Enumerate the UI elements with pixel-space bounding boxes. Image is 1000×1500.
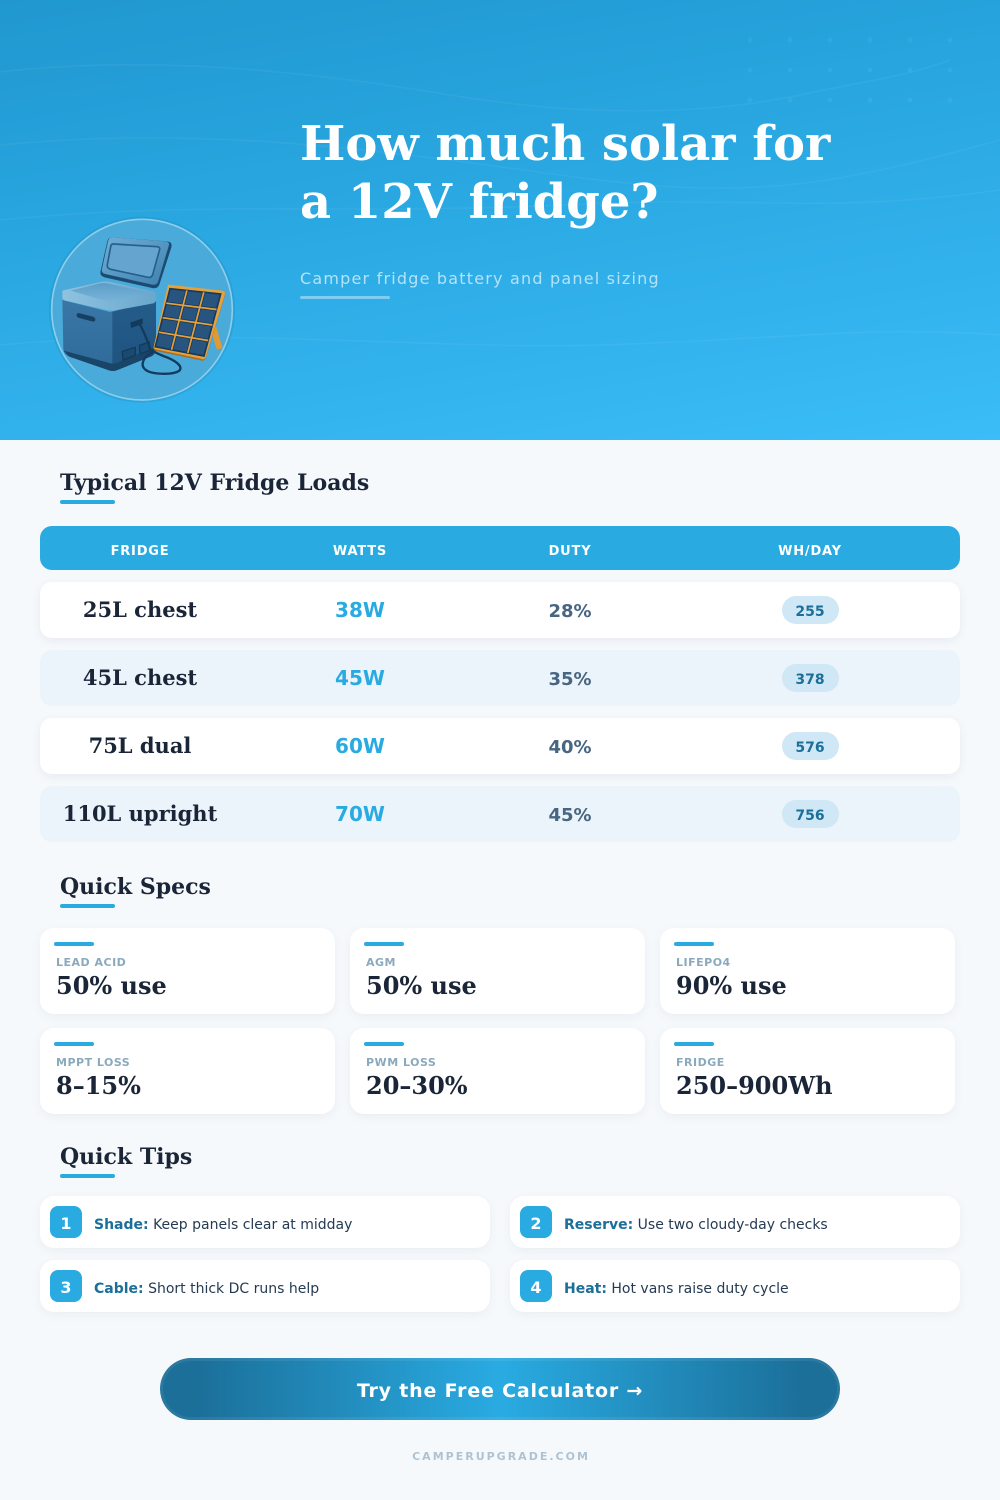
call to action button: Try the Free Calculator →	[357, 1380, 643, 1402]
table row: 45L chest: 45L chest	[83, 665, 197, 690]
spec card: fridge	[660, 1028, 955, 1114]
table row: 45L chest: 378	[795, 672, 825, 688]
tip 1: 1	[60, 1214, 72, 1233]
tip 4	[510, 1260, 960, 1312]
heading: quick specs: Quick Specs	[60, 874, 211, 900]
spec card: fridge: FRIDGE	[676, 1056, 725, 1069]
spec card: AGM: 50% use	[366, 971, 477, 1000]
title	[300, 116, 831, 230]
table row: 110L upright: 756	[795, 808, 825, 824]
table header: WH/DAY	[778, 544, 842, 559]
spec card: LiFePO4: 90% use	[676, 971, 787, 1000]
heading: quick tips: Quick Tips	[60, 1144, 192, 1170]
table header: FRIDGE	[111, 544, 169, 559]
badge circle	[49, 217, 235, 403]
table row: 25L chest	[40, 582, 960, 638]
tip 1: Shade: Keep panels clear at midday	[94, 1217, 352, 1233]
spec card: fridge: 250–900Wh	[676, 1071, 833, 1100]
hero background waves and dots	[0, 38, 1000, 346]
tip 4: 4	[530, 1278, 542, 1297]
spec card: AGM: AGM	[366, 956, 396, 969]
tip 2	[510, 1196, 960, 1248]
heading underline	[60, 500, 115, 504]
table row: 110L upright: 70W	[335, 802, 385, 826]
heading: typical loads: Typical 12V Fridge Loads	[60, 470, 369, 496]
tip 2: 2	[530, 1214, 542, 1233]
spec card: LiFePO4	[660, 928, 955, 1014]
table header: DUTY	[549, 544, 591, 559]
solar panel	[154, 285, 225, 361]
table header: WATTS	[333, 544, 387, 559]
table row: 25L chest: 28%	[548, 601, 592, 622]
table row: 45L chest: 45W	[335, 666, 385, 690]
table row: 75L dual: 40%	[548, 737, 592, 758]
fridge body	[62, 281, 156, 371]
spec card: MPPT loss	[40, 1028, 335, 1114]
tip 3	[40, 1260, 490, 1312]
table header	[40, 526, 960, 570]
power cable	[140, 325, 180, 374]
table row: 25L chest: 255	[795, 604, 825, 620]
tip 2: Reserve: Use two cloudy-day checks	[564, 1217, 828, 1233]
table row: 25L chest: 38W	[335, 598, 385, 622]
table row: 45L chest	[40, 650, 960, 706]
heading underline	[60, 904, 115, 908]
spec card: lead acid: 50% use	[56, 971, 167, 1000]
icon: fridge and solar panel	[49, 216, 235, 402]
table row: 75L dual: 75L dual	[89, 733, 191, 758]
spec card: PWM loss: 20–30%	[366, 1071, 468, 1100]
spec card: AGM	[350, 928, 645, 1014]
table row: 75L dual	[40, 718, 960, 774]
table row: 110L upright	[40, 786, 960, 842]
tip 3: Cable: Short thick DC runs help	[94, 1281, 319, 1297]
spec card: PWM loss	[350, 1028, 645, 1114]
tip 4: Heat: Hot vans raise duty cycle	[564, 1281, 789, 1297]
table row: 75L dual: 60W	[335, 734, 385, 758]
call to action button	[160, 1358, 840, 1420]
heading underline	[60, 1174, 115, 1178]
table row: 110L upright: 110L upright	[63, 801, 217, 826]
table row: 75L dual: 576	[795, 740, 825, 756]
spec card: PWM loss: PWM LOSS	[366, 1056, 436, 1069]
title: How much solar for	[300, 116, 830, 172]
subtitle underline	[300, 296, 390, 299]
tip 3: 3	[60, 1278, 72, 1297]
spec card: MPPT loss: MPPT LOSS	[56, 1056, 130, 1069]
title: a 12V fridge?	[300, 174, 659, 230]
tip 1	[40, 1196, 490, 1248]
spec card: LiFePO4: LIFEPO4	[676, 956, 731, 969]
spec card: lead acid: LEAD ACID	[56, 956, 126, 969]
table row: 110L upright: 45%	[548, 805, 592, 826]
spec card: lead acid	[40, 928, 335, 1014]
footer url: CAMPERUPGRADE.COM	[412, 1450, 590, 1463]
hero banner	[0, 0, 1000, 440]
fridge lid	[100, 237, 172, 288]
subtitle: Camper fridge battery and panel sizing	[300, 269, 660, 288]
table row: 25L chest: 25L chest	[83, 597, 197, 622]
spec card: MPPT loss: 8–15%	[56, 1071, 141, 1100]
table row: 45L chest: 35%	[548, 669, 592, 690]
